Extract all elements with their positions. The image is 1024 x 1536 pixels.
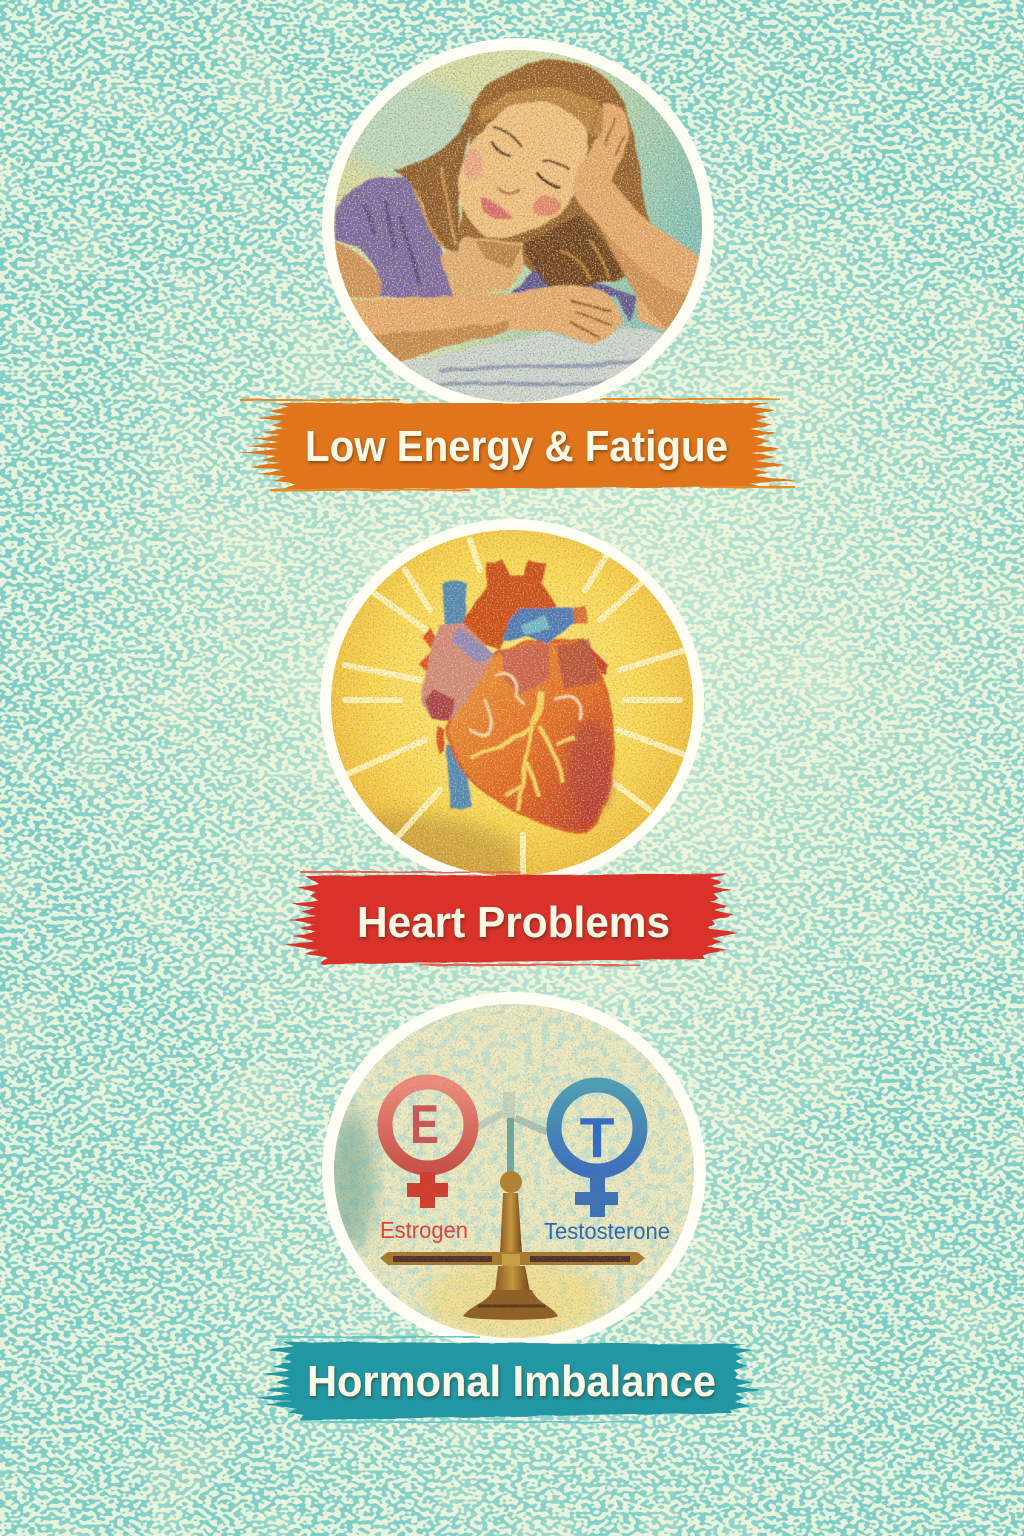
illustration: anatomical heart	[331, 530, 693, 876]
resting forearm	[350, 285, 622, 363]
hair back	[457, 60, 650, 290]
ring: hormone circle	[322, 992, 706, 1350]
left stubs	[418, 626, 436, 672]
pulmonary artery	[502, 605, 588, 643]
label: Estrogen: Estrogen	[380, 1217, 468, 1243]
panel: heart problems	[280, 515, 738, 965]
pillow	[400, 327, 667, 405]
illustration: tired woman	[330, 40, 710, 410]
hair right lower	[523, 215, 622, 288]
label: Testosterone: Testosterone	[544, 1218, 670, 1244]
scale post and arms	[478, 1092, 547, 1174]
panel: low energy and fatigue	[240, 38, 798, 490]
blue vein	[442, 581, 472, 809]
neck	[440, 237, 523, 298]
label: Hormonal Imbalance: Hormonal Imbalance	[307, 1357, 716, 1406]
ring: fatigue circle	[322, 38, 714, 414]
estrogen symbol: E	[410, 1093, 439, 1155]
label: Low Energy & Fatigue: Low Energy & Fatigue	[305, 422, 728, 471]
testosterone symbol	[554, 1085, 640, 1217]
atrium	[422, 623, 493, 720]
panel: hormonal imbalance	[254, 990, 762, 1422]
sun rays	[345, 540, 685, 875]
label: Heart Problems: Heart Problems	[357, 898, 670, 947]
coronary arteries	[470, 674, 581, 810]
testosterone symbol: T	[580, 1106, 615, 1170]
ring: heart circle	[320, 519, 704, 887]
lips	[480, 197, 513, 219]
raised hand and arm	[573, 103, 700, 333]
hair left strand	[393, 110, 475, 252]
closed eyes and brows	[493, 127, 570, 170]
banner: red brush stroke	[284, 872, 738, 965]
aorta	[463, 560, 557, 650]
pink muscle patches	[500, 643, 550, 695]
heart ventricle	[447, 640, 613, 833]
illustration: hormone balance scale	[334, 1004, 694, 1338]
upper arm	[335, 242, 382, 298]
purple shirt	[335, 177, 457, 298]
banner: orange brush stroke	[240, 399, 798, 490]
estrogen symbol	[385, 1082, 471, 1208]
face	[458, 101, 588, 238]
banner: teal brush stroke	[254, 1337, 762, 1422]
brass stand	[380, 1171, 645, 1320]
